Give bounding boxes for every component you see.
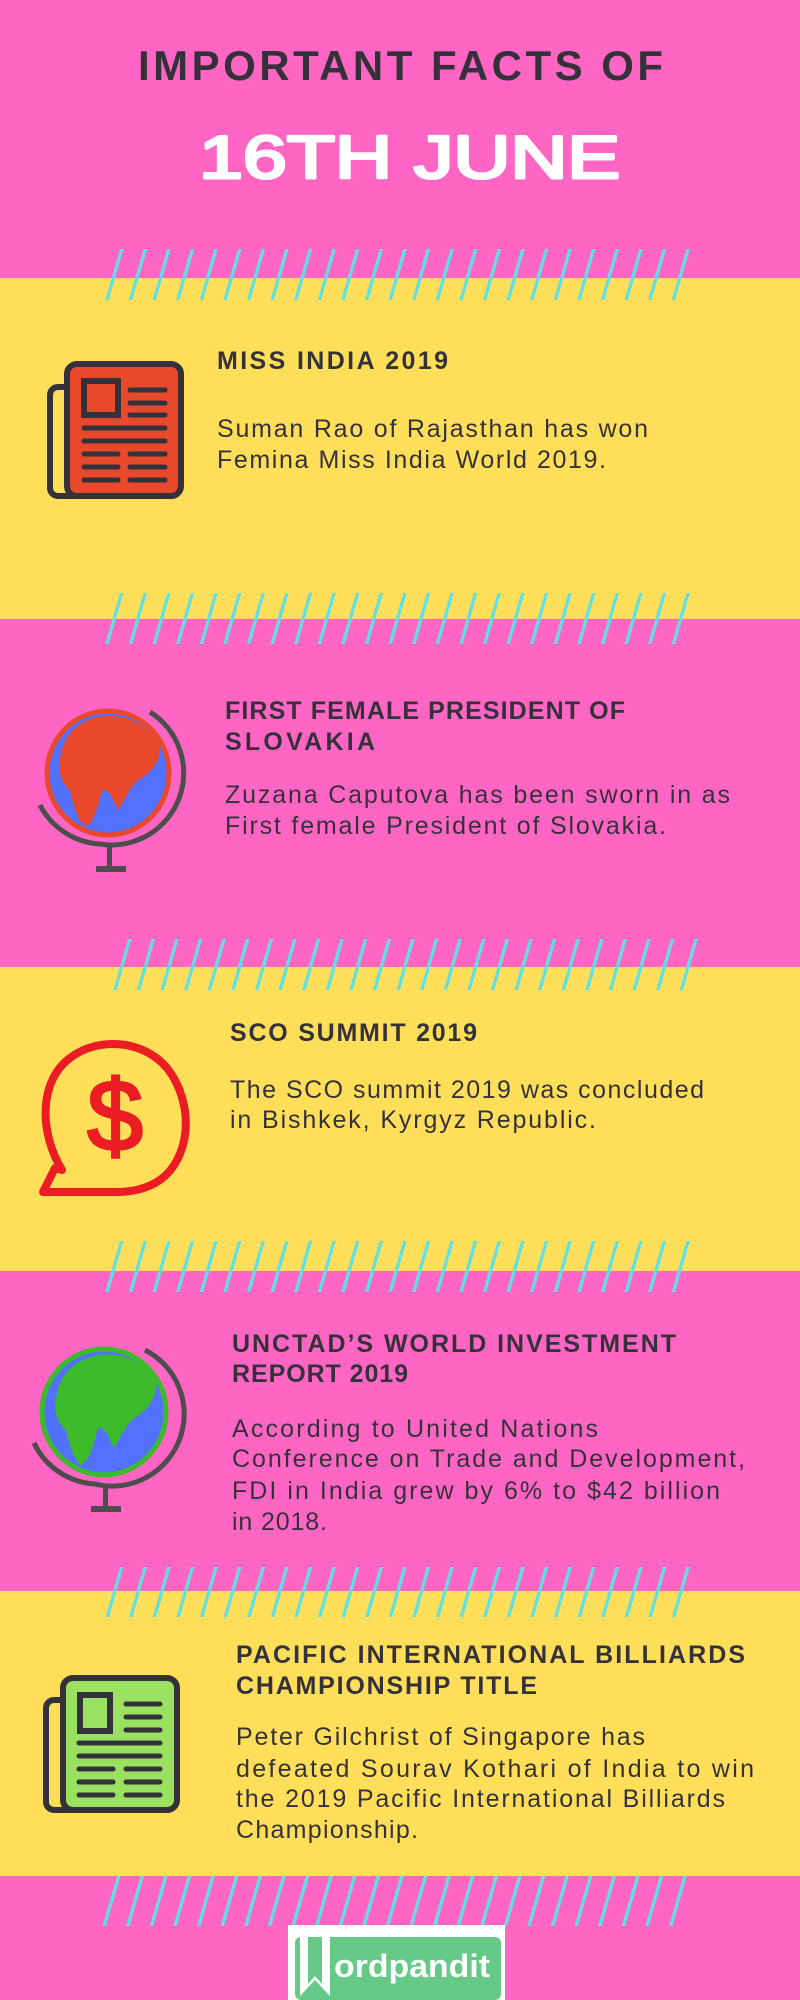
icon: newspaper red	[50, 364, 181, 496]
text block: Suman Rao of Rajasthan has won	[217, 415, 648, 443]
heading	[225, 697, 625, 756]
heading: CHAMPIONSHIP TITLE	[236, 1672, 537, 1700]
text block	[236, 1723, 754, 1844]
text block	[225, 781, 730, 840]
heading: PACIFIC INTERNATIONAL BILLIARDS	[236, 1641, 745, 1669]
heading: SLOVAKIA	[225, 728, 375, 756]
text block: in Bishkek, Kyrgyz Republic.	[230, 1106, 596, 1134]
icon: globe green	[34, 1349, 184, 1512]
panel: slovakia	[40, 697, 730, 872]
icon: dollar speech bubble	[43, 1044, 186, 1192]
panel: miss india	[50, 347, 648, 496]
heading: UNCTAD’S WORLD INVESTMENT	[232, 1330, 676, 1358]
text block: Zuzana Caputova has been sworn in as	[225, 781, 730, 809]
title	[138, 42, 663, 191]
text block: FDI in India grew by 6% to $42 billion	[232, 1477, 720, 1505]
text block: Conference on Trade and Development,	[232, 1445, 745, 1473]
text block: the 2019 Pacific International Billiards	[236, 1785, 725, 1813]
text block: Peter Gilchrist of Singapore has	[236, 1723, 645, 1751]
heading: MISS INDIA 2019	[217, 347, 448, 375]
logo: wordpandit	[288, 1925, 505, 2000]
icon: globe red	[40, 711, 184, 872]
title: IMPORTANT FACTS OF	[138, 42, 663, 89]
heading: FIRST FEMALE PRESIDENT OF	[225, 697, 625, 725]
icon: newspaper green	[46, 1678, 177, 1810]
text block: According to United Nations	[232, 1415, 598, 1443]
text block	[217, 415, 648, 474]
icon: dollar speech bubble: $	[87, 1060, 143, 1172]
panel: billiards	[46, 1641, 754, 1844]
heading: SCO SUMMIT 2019	[230, 1019, 477, 1047]
text block: in 2018.	[232, 1508, 327, 1536]
text block: Championship.	[236, 1816, 418, 1844]
text block: First female President of Slovakia.	[225, 812, 666, 840]
text block: defeated Sourav Kothari of India to win	[236, 1755, 754, 1783]
text block	[230, 1076, 704, 1134]
panel: sco summit	[43, 1019, 704, 1192]
text block	[232, 1415, 745, 1536]
heading: REPORT 2019	[232, 1360, 408, 1388]
heading	[232, 1330, 676, 1388]
logo: wordpandit: ordpandit	[334, 1948, 490, 1984]
heading	[236, 1641, 745, 1700]
title: 16TH JUNE	[199, 124, 620, 191]
text block: The SCO summit 2019 was concluded	[230, 1076, 704, 1104]
panel: unctad	[34, 1330, 745, 1536]
text block: Femina Miss India World 2019.	[217, 446, 606, 474]
